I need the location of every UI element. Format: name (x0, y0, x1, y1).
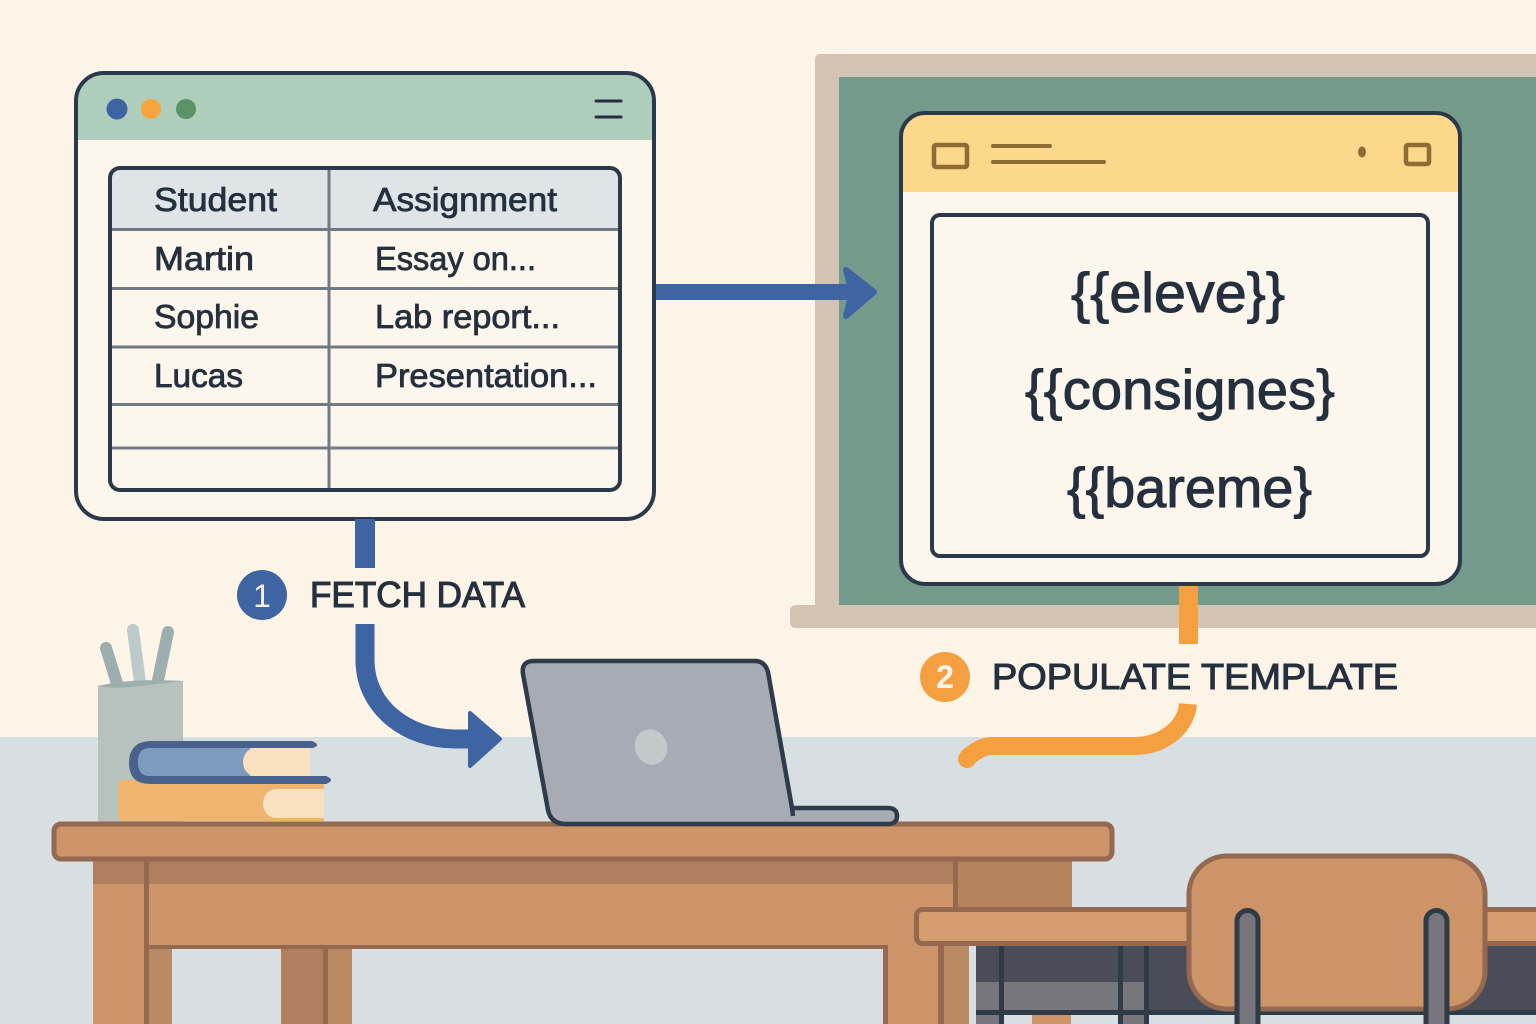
chalkboard ledge (790, 605, 1536, 628)
right rear panel (956, 858, 1072, 910)
template placeholders: {{eleve}} (1071, 261, 1285, 324)
table text (154, 181, 597, 394)
chalkboard frame (815, 54, 1536, 606)
arrow: curved orange line (958, 704, 1188, 768)
teacher desk (54, 824, 1112, 1024)
window control dots (106, 98, 196, 120)
table text: Student (154, 181, 277, 218)
template inner box (932, 215, 1428, 556)
orange book (118, 780, 324, 821)
table text: Assignment (373, 181, 557, 218)
step 2 badge: 2 (936, 659, 954, 695)
icon: stacked books (118, 741, 331, 821)
arrow: spreadsheet to template (654, 270, 874, 316)
shelf bottom rail (976, 1010, 1536, 1015)
background wall (0, 0, 1536, 738)
chair legs (1237, 910, 1447, 1024)
laptop logo (630, 725, 672, 769)
blue book body (138, 748, 250, 776)
student desk top (916, 910, 1536, 944)
left front leg (93, 858, 146, 1024)
shelf lighter band (976, 982, 1144, 1011)
pencils (106, 630, 168, 690)
table grid (112, 170, 618, 488)
template outline (901, 113, 1460, 584)
desk structure lines (144, 858, 958, 1024)
chair back (1189, 856, 1485, 1009)
right front leg (883, 945, 969, 1024)
icon: laptop (523, 661, 897, 824)
template placeholders: {{consignes} (1025, 358, 1335, 421)
step 2 badge (920, 652, 970, 702)
step 1 badge (237, 570, 287, 620)
cup body (98, 681, 183, 824)
table header row (112, 170, 618, 228)
apron shadow (93, 858, 953, 884)
chalkboard green surface (839, 77, 1536, 605)
desk top (54, 824, 1112, 859)
template placeholders (1025, 261, 1335, 519)
middle back leg (281, 945, 352, 1024)
step 1 badge: 1 (253, 578, 271, 614)
window outline (76, 73, 654, 519)
connector: orange line from template (1179, 586, 1198, 644)
laptop hinge (792, 808, 793, 816)
table text: Essay on... (375, 240, 536, 277)
arrow: curved blue arrow to laptop (365, 624, 500, 766)
blue book cover (129, 741, 331, 784)
step 1 label: FETCH DATA (310, 574, 525, 615)
step 2 label: POPULATE TEMPLATE (992, 656, 1398, 697)
shelf side legs (976, 945, 1149, 1024)
left back leg (146, 945, 172, 1024)
orange leg stub (1032, 1012, 1071, 1024)
table background (110, 168, 620, 490)
background floor band (0, 737, 1536, 1024)
template header bar (903, 115, 1458, 192)
table text: Sophie (154, 298, 259, 335)
table text: Lab report... (375, 298, 560, 335)
desk apron (146, 858, 956, 946)
table text: Martin (154, 240, 254, 277)
panel: spreadsheet window (76, 73, 654, 519)
window body (76, 73, 654, 519)
table text: Lucas (154, 357, 243, 394)
orange book pages (263, 789, 324, 818)
template header icons (934, 145, 1429, 167)
icon: hamburger menu (596, 101, 621, 117)
connector: blue line from spreadsheet (355, 519, 375, 568)
student desk and chair (916, 856, 1536, 1024)
chalkboard (790, 54, 1536, 628)
template placeholders: {{bareme} (1067, 456, 1312, 519)
table outline (110, 168, 620, 490)
icon: pencil cup (98, 630, 183, 824)
panel: template window (901, 113, 1460, 584)
window header bar (78, 75, 652, 140)
table text: Presentation... (375, 357, 597, 394)
cup rim (98, 680, 183, 688)
blue book pages (243, 748, 310, 776)
data table (110, 168, 620, 490)
under-desk shelf (976, 945, 1536, 1013)
template body (901, 113, 1460, 584)
